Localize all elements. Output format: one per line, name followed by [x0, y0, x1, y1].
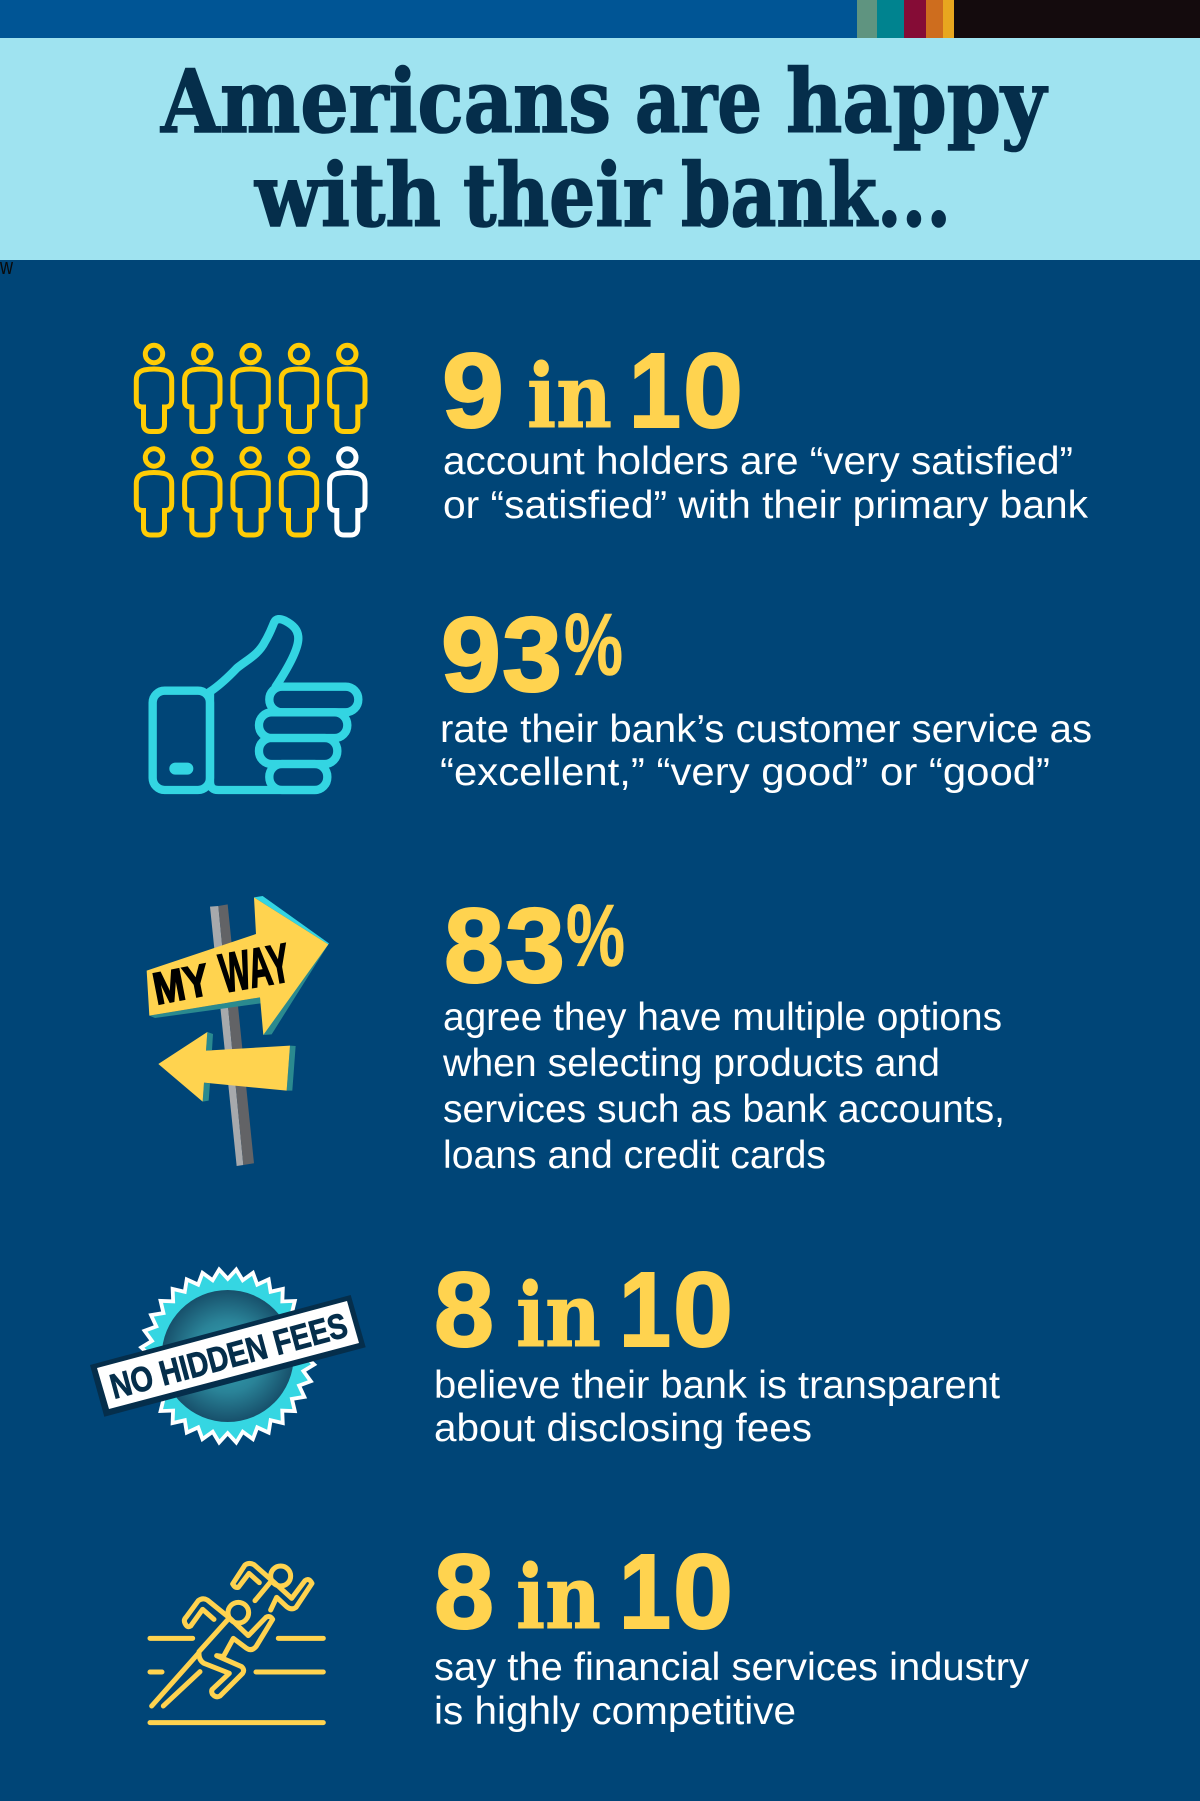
stat 5: 8 in 10: [434, 1533, 1029, 1733]
big number: [434, 1251, 733, 1369]
big number: %: [564, 595, 623, 694]
big number: [442, 332, 743, 450]
big number: [441, 595, 623, 714]
big number: 1: [619, 1251, 671, 1369]
icon: my way signpost: [147, 896, 329, 1166]
big number: [444, 886, 625, 1005]
big number: %: [566, 886, 625, 985]
banner text: NO HIDDEN FEES: [106, 1306, 352, 1407]
description: or “satisfied” with their primary bank: [443, 484, 1089, 527]
top colour bar: [0, 0, 1200, 38]
title banner: [0, 38, 1200, 260]
description: [434, 1364, 1000, 1450]
description: [443, 440, 1089, 527]
description: say the financial services industry: [434, 1646, 1029, 1689]
description: [440, 708, 1092, 794]
title line 1: Americans: [160, 50, 611, 153]
big number: 0: [673, 1251, 733, 1369]
description: is highly competitive: [434, 1690, 796, 1733]
big number: 1: [619, 1533, 671, 1651]
title line 2: their: [463, 144, 662, 247]
big number: in: [527, 344, 612, 448]
big number: 0: [683, 332, 743, 450]
title line 1: are: [635, 50, 762, 153]
big number: 8: [434, 1251, 494, 1369]
icon: thumbs up: [153, 619, 358, 790]
big number: in: [516, 1545, 601, 1649]
stat 3: 83%: [442, 886, 1005, 1177]
description: rate their bank’s customer service as: [440, 708, 1092, 751]
sign text: WAY: [215, 931, 295, 1004]
big number: 9: [442, 332, 504, 450]
description: account holders are “very satisfied”: [443, 440, 1073, 483]
description: when selecting products and: [442, 1042, 940, 1085]
stat 1: 9 in 10: [442, 332, 1089, 527]
icon: runners: [150, 1563, 323, 1723]
title line 2: bank...: [681, 144, 951, 247]
big number: 1: [629, 332, 681, 450]
description: agree they have multiple options: [443, 996, 1002, 1039]
big number: 8: [434, 1533, 494, 1651]
big number: 0: [673, 1533, 733, 1651]
title line 1: happy: [786, 50, 1048, 153]
stray letter: w: [0, 254, 13, 279]
icon: ten people, nine highlighted: [136, 345, 365, 535]
title line 1: [160, 50, 1048, 153]
description: believe their bank is transparent: [434, 1364, 1000, 1407]
sign text: [149, 931, 295, 1014]
description: loans and credit cards: [443, 1134, 826, 1177]
big number: in: [516, 1263, 601, 1367]
sign text: MY: [149, 954, 214, 1014]
big number: 8: [444, 887, 504, 1005]
big number: [434, 1533, 733, 1651]
icon: no hidden fees badge: [90, 1258, 366, 1454]
big number: 3: [505, 887, 565, 1005]
stat 2: 93%: [440, 595, 1092, 794]
description: about disclosing fees: [434, 1407, 812, 1450]
big number: 9: [441, 596, 501, 714]
title line 2: [254, 144, 951, 247]
description: [434, 1646, 1029, 1733]
description: “excellent,” “very good” or “good”: [440, 751, 1050, 794]
stat 4: 8 in 10: [434, 1251, 1000, 1450]
description: [442, 996, 1005, 1177]
description: services such as bank accounts,: [443, 1088, 1005, 1131]
title line 2: with: [254, 144, 441, 247]
big number: 3: [502, 596, 562, 714]
